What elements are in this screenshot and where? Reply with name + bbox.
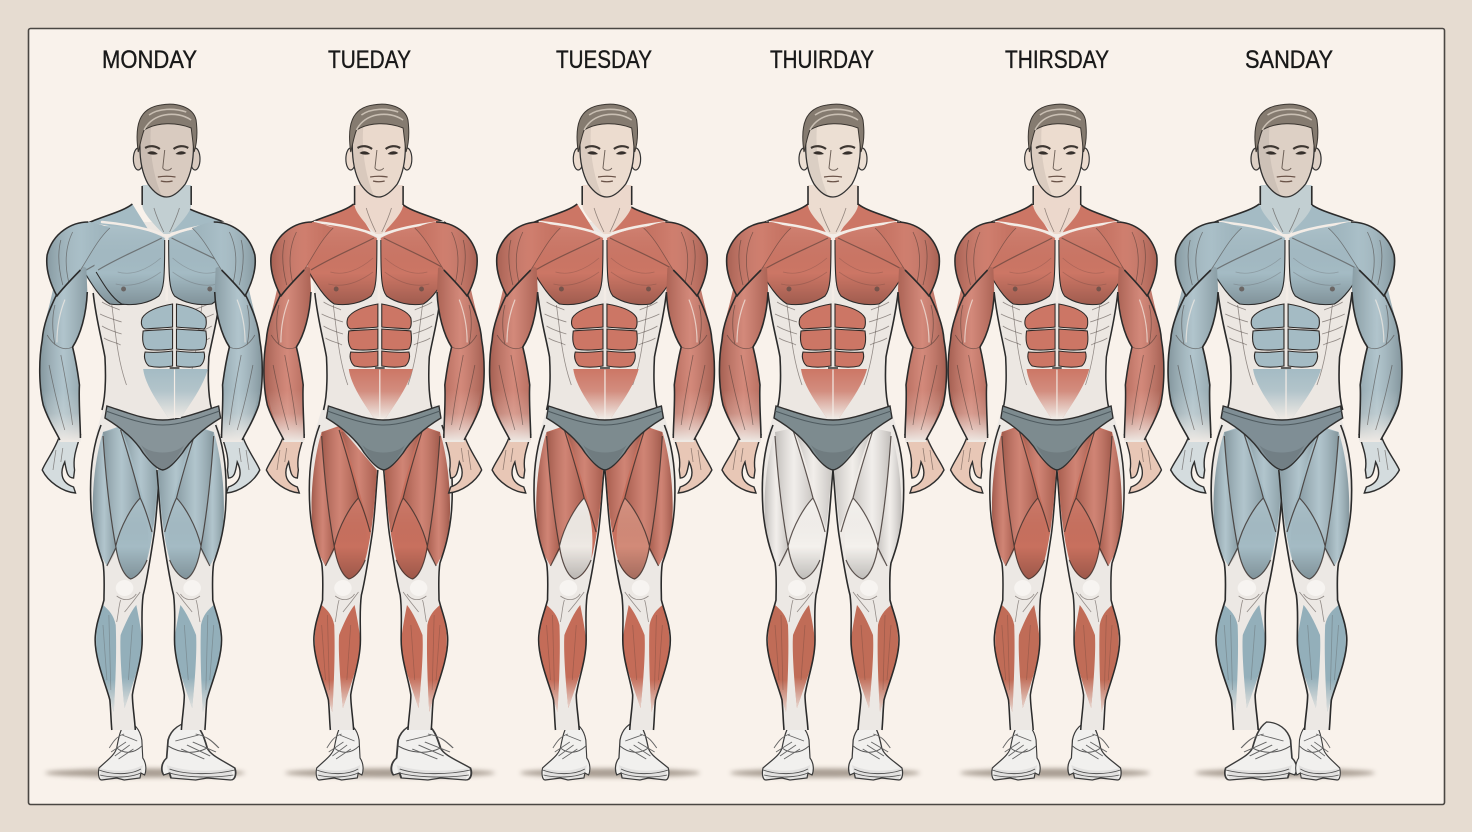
torso (1213, 204, 1357, 410)
left shoe (992, 722, 1040, 780)
abdominals (347, 304, 413, 418)
neck and head (1025, 104, 1089, 234)
torso (88, 204, 225, 410)
left leg (309, 405, 378, 730)
left shoe (542, 722, 590, 780)
abdominals (799, 304, 867, 418)
ground shadows (45, 768, 1375, 778)
right shoe (849, 722, 903, 780)
arms and shoulders (264, 222, 484, 493)
left shoe (98, 722, 146, 780)
chest (759, 222, 907, 305)
right leg (1057, 405, 1124, 730)
right shoe (162, 722, 236, 780)
arms and shoulders (948, 222, 1164, 493)
figure: Tueday, red (active) (264, 104, 484, 780)
abdominals (141, 304, 208, 418)
left leg (534, 405, 604, 730)
heading: Thirsday: THIRSDAY (1005, 46, 1109, 74)
left shoe (762, 722, 813, 780)
left leg (91, 405, 160, 730)
right leg (384, 405, 452, 730)
heading: Sanday: SANDAY (1245, 46, 1333, 74)
right leg (157, 405, 226, 730)
abdominals (1251, 304, 1321, 418)
abdominals (1025, 304, 1089, 418)
chest (1211, 222, 1363, 305)
heading: Tueday: TUEDAY (328, 46, 411, 74)
right shoe (1068, 722, 1121, 780)
right shoe (1296, 722, 1340, 780)
heading: Monday: MONDAY (102, 46, 197, 74)
left shoe (1225, 722, 1297, 780)
left leg (1211, 405, 1284, 730)
briefs (1001, 406, 1113, 470)
chest (532, 222, 678, 305)
briefs (326, 406, 441, 470)
arms and shoulders (490, 222, 714, 493)
heading: Thuirday: THUIRDAY (770, 46, 874, 74)
figure: Tuesday, red with white thigh lobe (490, 104, 714, 780)
torso (763, 204, 903, 410)
briefs (547, 406, 663, 470)
figure: Sanday, blue (rest) (1168, 104, 1402, 780)
right leg (605, 405, 675, 730)
right shoe (615, 722, 669, 780)
briefs (774, 406, 892, 470)
abdominals (572, 304, 639, 418)
right leg (1279, 405, 1352, 730)
arms and shoulders (40, 222, 262, 493)
chest (94, 222, 239, 305)
briefs (105, 406, 221, 470)
neck and head (133, 104, 200, 234)
left chest extension (82, 226, 153, 305)
briefs (1221, 406, 1343, 470)
neck and head (573, 104, 641, 234)
neck and head (346, 104, 412, 234)
heading: Tuesday: TUESDAY (556, 46, 652, 74)
torso (990, 204, 1122, 410)
figure: Monday, blue (rest) (40, 104, 262, 780)
torso (533, 204, 671, 410)
neck and head (799, 104, 867, 234)
neck and head (1251, 104, 1321, 234)
figure: Thirsday, red (active) (948, 104, 1164, 780)
left shoe (316, 722, 363, 780)
arms and shoulders (1168, 222, 1402, 493)
right leg (833, 405, 904, 730)
chest (987, 222, 1127, 305)
right shoe (391, 722, 471, 780)
figure: Thuirday, red upper body and white thighs (719, 104, 947, 780)
left leg (990, 405, 1057, 730)
chest (307, 222, 451, 305)
torso (310, 204, 446, 410)
arms and shoulders (719, 222, 947, 493)
left leg (762, 405, 833, 730)
